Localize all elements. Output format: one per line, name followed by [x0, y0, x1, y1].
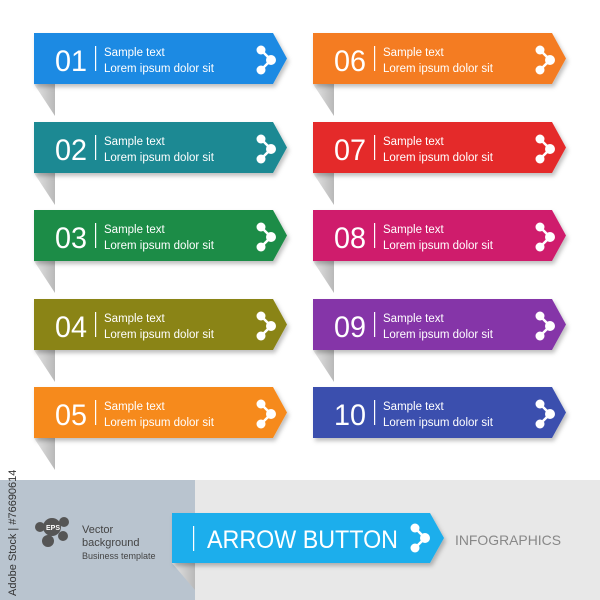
ribbon 08: Lorem ipsum dolor sit	[383, 240, 494, 252]
icon: EPS: EPS	[46, 525, 60, 532]
ribbon 01: Lorem ipsum dolor sit	[104, 63, 215, 75]
ribbon 08: 08	[334, 222, 366, 255]
ribbon 02: 02	[55, 134, 87, 167]
ribbon 07	[313, 122, 566, 205]
ribbon 06: 06	[334, 45, 366, 78]
footer band	[0, 480, 600, 600]
stock id vertical text: Adobe Stock | #76690614	[7, 470, 19, 596]
footer caption: Vector	[82, 524, 114, 536]
icon: EPS	[35, 517, 69, 547]
ribbon 03: Sample text	[104, 224, 166, 236]
footer caption: Business template	[82, 551, 156, 561]
ribbon 03: 03	[55, 222, 87, 255]
ribbon 06: Lorem ipsum dolor sit	[383, 63, 494, 75]
ribbon 09	[313, 299, 566, 382]
ribbon 04: 04	[55, 311, 87, 344]
ribbon 10	[313, 387, 566, 438]
ribbon 09: 09	[334, 311, 366, 344]
ribbon 10: Lorem ipsum dolor sit	[383, 417, 494, 429]
ribbon 02: Lorem ipsum dolor sit	[104, 152, 215, 164]
ribbon 05: Lorem ipsum dolor sit	[104, 417, 215, 429]
footer caption: background	[82, 537, 140, 549]
ribbon 03	[34, 210, 287, 293]
ribbon 09: Lorem ipsum dolor sit	[383, 329, 494, 341]
ribbon 07: Lorem ipsum dolor sit	[383, 152, 494, 164]
ribbon 08: Sample text	[383, 224, 445, 236]
infographics label: INFOGRAPHICS	[455, 532, 561, 548]
ribbon 07: 07	[334, 134, 366, 167]
ribbon 06: Sample text	[383, 47, 445, 59]
main arrow button: ARROW BUTTON	[207, 526, 398, 554]
ribbon 09: Sample text	[383, 313, 445, 325]
main arrow button	[172, 513, 444, 590]
ribbon 05	[34, 387, 287, 470]
ribbon 05: Sample text	[104, 401, 166, 413]
ribbon 06	[313, 33, 566, 116]
ribbon 01: 01	[55, 45, 87, 78]
ribbon 01	[34, 33, 287, 116]
ribbon 10: 10	[334, 399, 366, 432]
ribbon 02	[34, 122, 287, 205]
ribbon 04	[34, 299, 287, 382]
ribbon 01: Sample text	[104, 47, 166, 59]
ribbon 02: Sample text	[104, 136, 166, 148]
ribbon 10: Sample text	[383, 401, 445, 413]
ribbon 04: Lorem ipsum dolor sit	[104, 329, 215, 341]
ribbon 03: Lorem ipsum dolor sit	[104, 240, 215, 252]
ribbon 04: Sample text	[104, 313, 166, 325]
footer caption	[82, 524, 156, 561]
ribbon 07: Sample text	[383, 136, 445, 148]
ribbon 05: 05	[55, 399, 87, 432]
ribbon 08	[313, 210, 566, 293]
